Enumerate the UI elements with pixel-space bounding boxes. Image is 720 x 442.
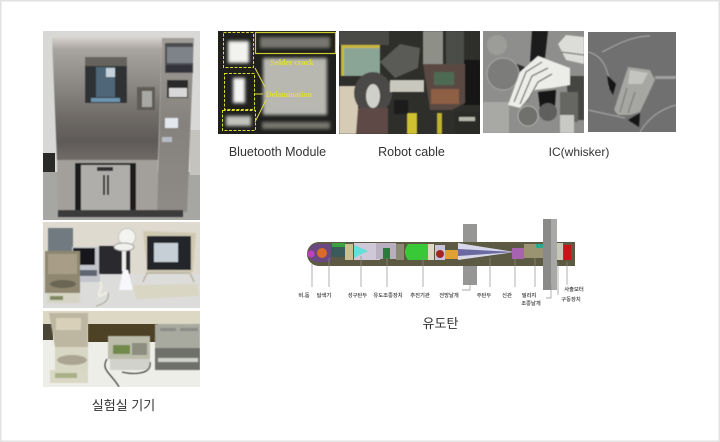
photo: IC whisker micrograph, wide view bbox=[483, 31, 584, 133]
component labels: 밀리지 bbox=[522, 291, 536, 299]
photo: IC whisker micrograph, close view bbox=[588, 32, 676, 132]
photo: bluetooth module x-ray bbox=[218, 31, 336, 134]
component labels: 탐색기 bbox=[317, 291, 331, 299]
photo: bluetooth module x-ray: Solder crack bbox=[270, 58, 314, 67]
photo: environmental test chamber bbox=[43, 31, 200, 220]
photo: bluetooth module x-ray: Delamination bbox=[266, 90, 313, 99]
component labels: 사출모터 bbox=[564, 285, 584, 293]
component labels: 추진기관 bbox=[410, 291, 430, 299]
component labels: 유도조종장치 bbox=[373, 291, 403, 299]
caption: robot cable: Robot cable bbox=[378, 145, 445, 159]
component labels: 조종날개 bbox=[521, 299, 541, 307]
fin: rear bbox=[543, 219, 557, 290]
caption: lab equipment: 실험실 기기 bbox=[92, 398, 155, 413]
caption: bluetooth module: Bluetooth Module bbox=[229, 145, 326, 159]
component labels bbox=[298, 285, 584, 307]
photo: balance, oscilloscope, magnifier and computer bbox=[43, 222, 200, 308]
component labels: 비.돔 bbox=[298, 291, 310, 299]
fin: forward bbox=[463, 224, 477, 285]
missile body bbox=[307, 242, 575, 266]
photo: balance and measuring instruments bbox=[43, 311, 200, 387]
component labels: 성구탄두 bbox=[348, 291, 367, 299]
leader lines bbox=[312, 256, 567, 298]
component labels: 전방날개 bbox=[439, 291, 459, 299]
component labels: 주탄두 bbox=[477, 291, 491, 299]
component labels: 신관 bbox=[502, 291, 512, 299]
caption: IC whisker: IC(whisker) bbox=[549, 145, 609, 159]
caption: guided missile: 유도탄 bbox=[423, 316, 458, 331]
diagram: guided missile cutaway bbox=[298, 219, 584, 307]
component labels: 구동장치 bbox=[561, 295, 581, 303]
photo: robot cable bbox=[339, 31, 480, 134]
